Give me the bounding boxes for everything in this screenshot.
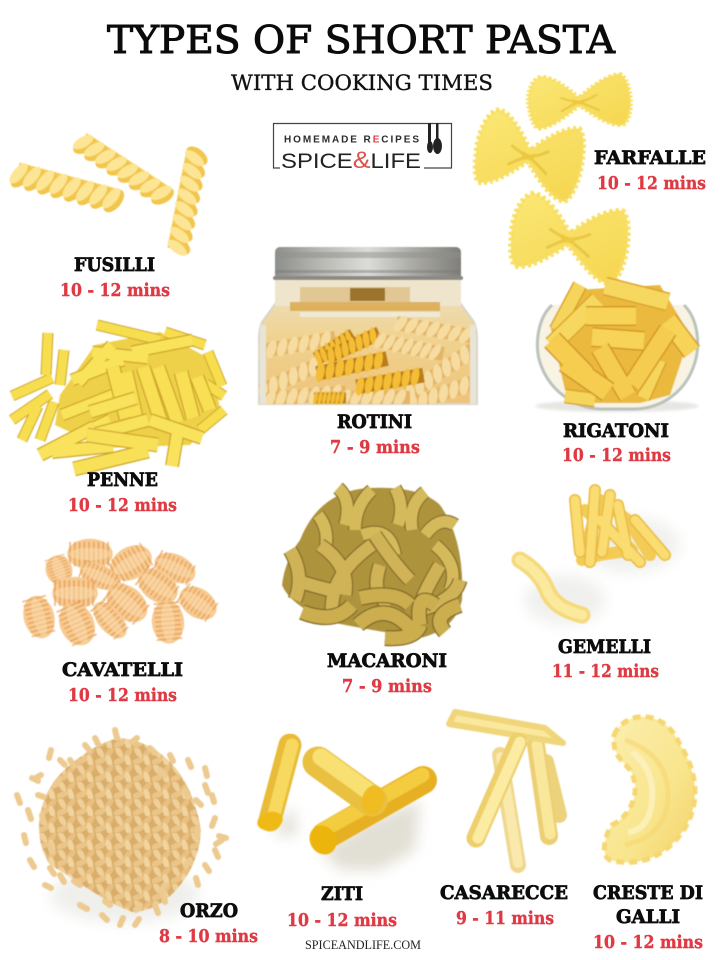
label: PENNE [87, 470, 158, 491]
icon: fork and spoon [427, 123, 442, 154]
image: casarecce pasta [449, 712, 563, 865]
image: penne pasta [12, 325, 224, 469]
image: macaroni pasta [282, 488, 462, 638]
cooking time: 10 - 12 mins [60, 280, 170, 301]
label: FUSILLI [74, 255, 155, 276]
cooking time: 10 - 12 mins [562, 445, 671, 466]
label: CASARECCE [440, 883, 568, 904]
subtitle: WITH COOKING TIMES [231, 71, 493, 95]
image: gemelli pasta [520, 490, 680, 625]
logo tagline: HOMEMADE RECIPES [284, 134, 419, 146]
image: orzo pasta [17, 730, 226, 925]
cooking time: 7 - 9 mins [342, 676, 432, 697]
image: cavatelli pasta [19, 538, 223, 651]
label: CAVATELLI [62, 660, 183, 681]
cooking time: 11 - 12 mins [552, 661, 659, 682]
label: FARFALLE [594, 148, 706, 169]
panel: farfalle [469, 72, 706, 286]
label: first line: CRESTE DI [593, 883, 703, 904]
panel: creste di galli [593, 717, 703, 953]
panel: gemelli [520, 490, 680, 682]
image: farfalle pasta [469, 72, 634, 286]
label: RIGATONI [563, 421, 669, 442]
logo wordmark: SPICE &LIFE [281, 147, 421, 174]
panel: fusilli [4, 126, 213, 301]
panel: cavatelli [19, 538, 223, 706]
image: rigatoni in glass bowl [535, 285, 699, 412]
website footer: SPICEANDLIFE.COM [305, 937, 421, 952]
cooking time: 7 - 9 mins [330, 437, 420, 458]
panel: rotini [250, 247, 479, 458]
label: ORZO [180, 901, 238, 922]
cooking time: 9 - 11 mins [456, 908, 554, 929]
image: creste di galli pasta [604, 717, 695, 862]
label: second line: GALLI [616, 907, 680, 928]
title: TYPES OF SHORT PASTA [107, 18, 616, 62]
panel: rigatoni [535, 285, 699, 466]
cooking time: 10 - 12 mins [68, 495, 177, 516]
panel: macaroni [282, 488, 462, 697]
image: fusilli pasta [4, 126, 213, 260]
panel: orzo [17, 730, 258, 947]
image: jar of rotini [258, 246, 478, 406]
cooking time: 10 - 12 mins [287, 910, 397, 931]
image: ziti pasta [255, 745, 423, 870]
label: ZITI [321, 884, 363, 905]
cooking time: 10 - 12 mins [68, 685, 177, 706]
label: MACARONI [327, 651, 447, 672]
panel: ziti [255, 745, 423, 931]
logo: Spice & Life [274, 123, 452, 174]
cooking time: 10 - 12 mins [597, 173, 706, 194]
panel: penne [12, 325, 224, 516]
cooking time: 8 - 10 mins [159, 926, 258, 947]
label: ROTINI [337, 412, 412, 433]
cooking time: 10 - 12 mins [593, 932, 703, 953]
label: GEMELLI [558, 637, 651, 658]
panel: casarecce [440, 712, 568, 929]
